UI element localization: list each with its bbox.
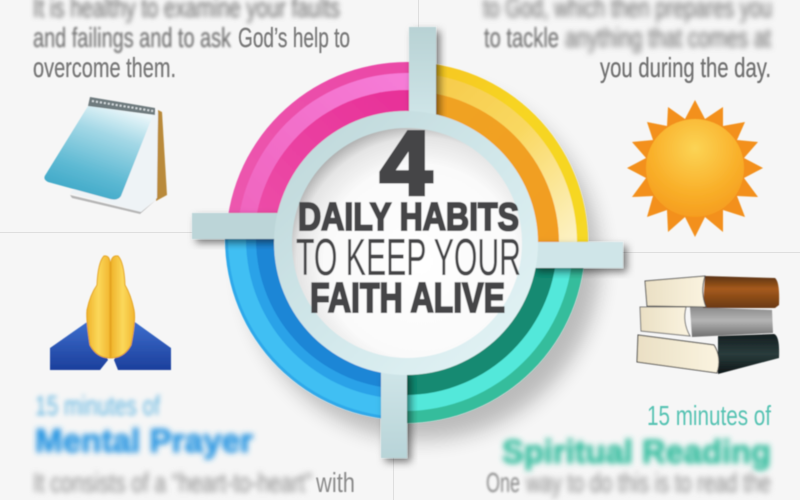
crosshair bars [192, 27, 623, 458]
bar: left [192, 213, 282, 239]
text block: spiritual reading [486, 400, 771, 498]
title line 1: DAILY HABITS [298, 196, 519, 239]
text block: top left [33, 0, 350, 83]
segment: teal [406, 268, 584, 424]
text block: top right: to tackle [484, 22, 559, 53]
bar: top [409, 27, 436, 117]
title numeral: 4 [380, 114, 432, 214]
white centre disc [292, 128, 522, 358]
body text: It consists of a “heart-to-heart” [33, 467, 312, 498]
icon: stack of books [637, 276, 779, 374]
segment: yellow [436, 64, 589, 242]
heading: Mental Prayer [35, 422, 253, 459]
book: bottom [637, 334, 779, 374]
text block: top left: overcome them. [33, 52, 176, 83]
icon: praying hands [50, 256, 171, 370]
wheel shadow [244, 84, 600, 440]
title line 2: TO KEEP YOUR [296, 229, 521, 287]
segment: pink [228, 61, 410, 214]
text block: mental prayer [33, 390, 355, 498]
inner light ring [274, 111, 538, 375]
text block: top left: God’s help to [238, 22, 350, 53]
subheading: 15 minutes of [35, 390, 160, 421]
bar: bottom [381, 370, 407, 458]
book: middle [640, 307, 773, 337]
book: top [645, 276, 779, 308]
body text: One [486, 467, 520, 498]
title [296, 114, 521, 321]
icon: sun [627, 100, 763, 237]
segment: blue [224, 238, 382, 419]
text block: top right [483, 0, 772, 83]
body text: with [315, 467, 355, 498]
central wheel [192, 27, 623, 458]
heading: Spiritual Reading [502, 433, 771, 470]
text block: top left: and failings and to ask [33, 22, 232, 53]
icon: notepad [44, 97, 167, 214]
title line 3: FAITH ALIVE [310, 274, 505, 321]
bar: right [532, 242, 623, 268]
